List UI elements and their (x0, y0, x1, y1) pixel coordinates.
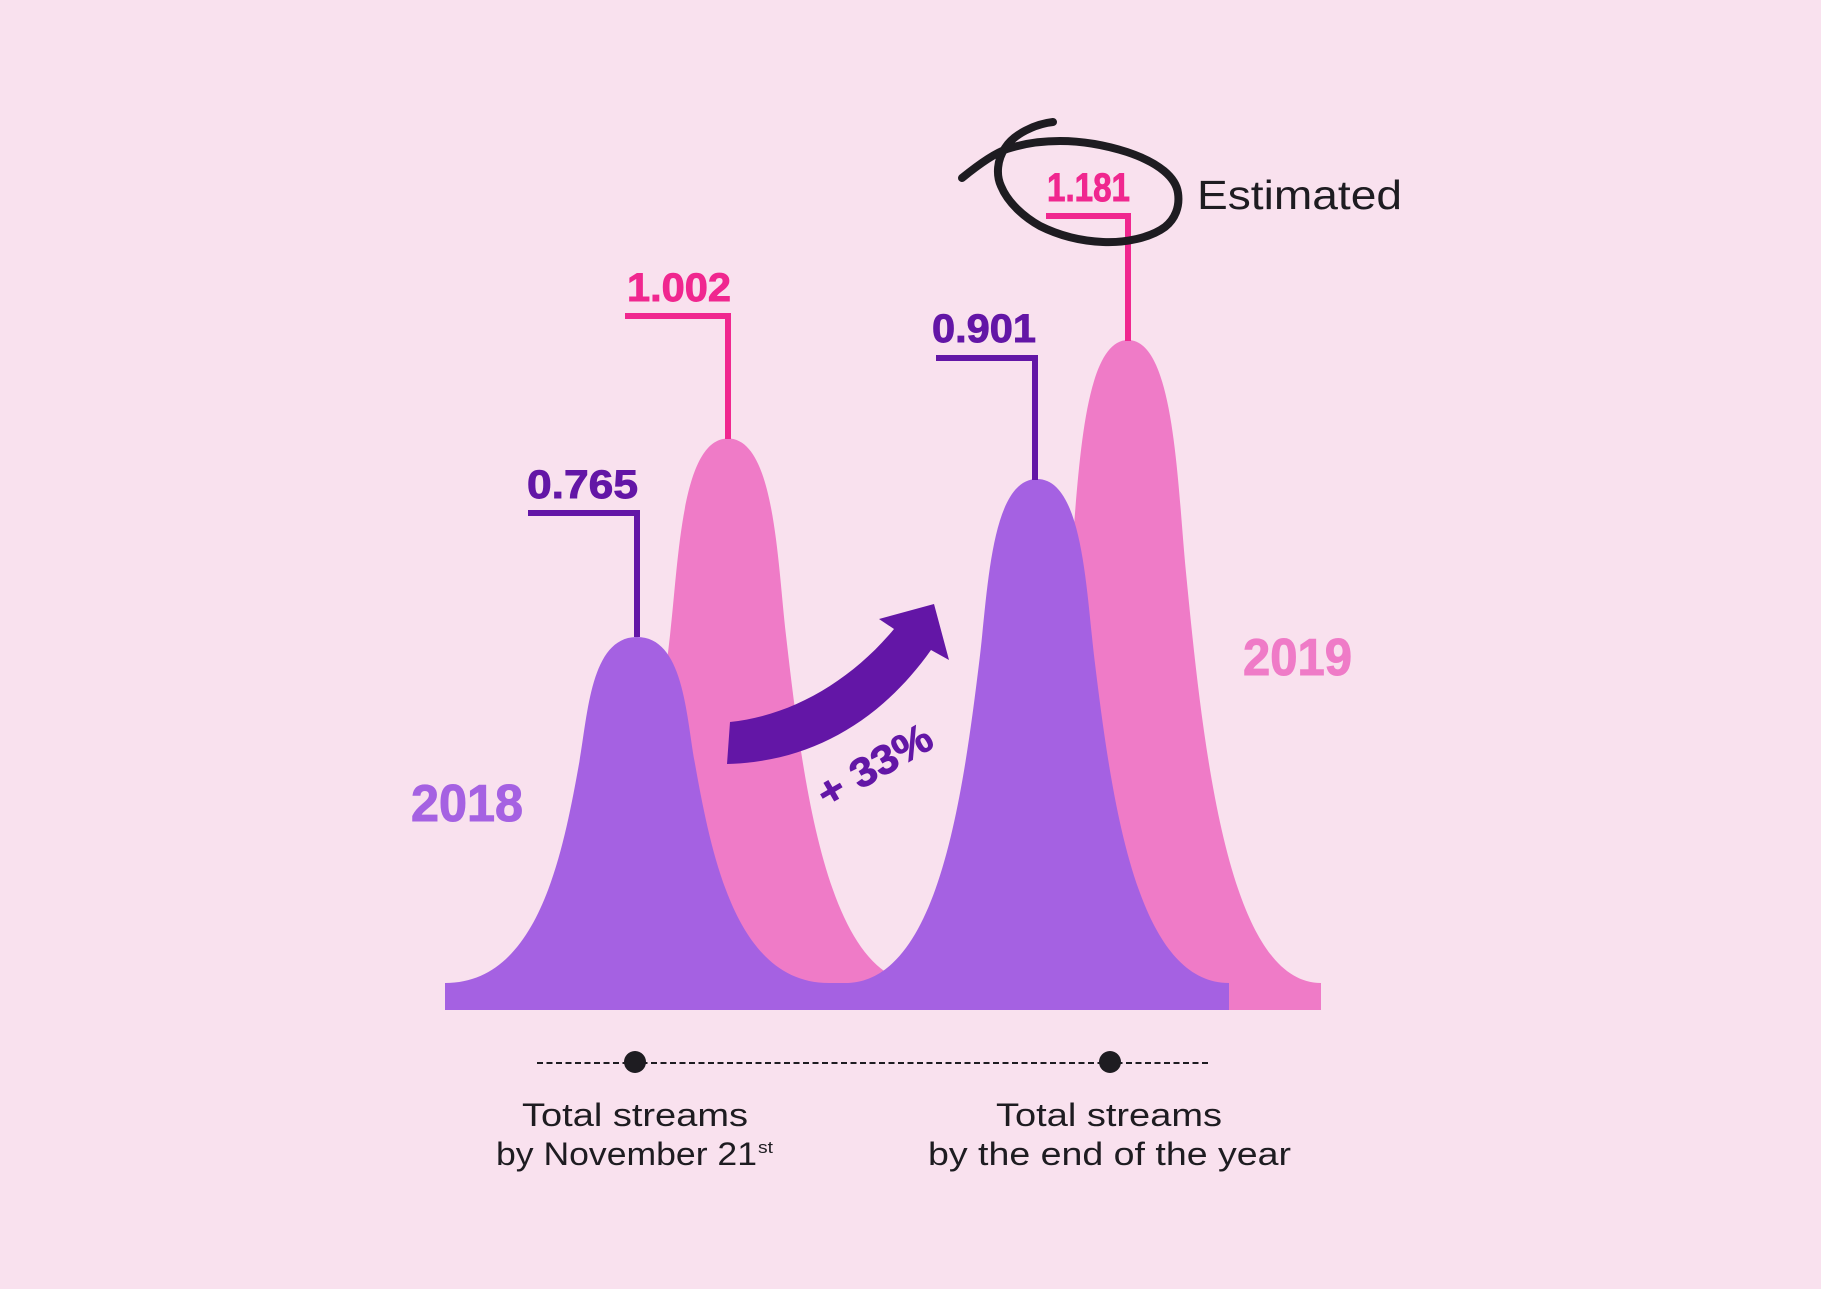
chart: overlapping bell curves (445, 340, 1321, 1010)
caption: total streams by the end of the year (928, 1097, 1291, 1172)
bell: 2019 November value (535, 438, 921, 983)
timeline marker: November 21st (624, 1051, 646, 1073)
caption: total streams by November 21st (496, 1097, 773, 1172)
timeline marker: year end (1099, 1051, 1121, 1073)
callout: 1.181: 1.181 (1047, 166, 1130, 210)
arrow: growth (727, 604, 949, 764)
label: 2019: 2019 (1243, 629, 1352, 687)
callout: 0.765: 0.765 (527, 463, 638, 507)
callout: 0.765 (527, 463, 638, 637)
label: +33%: + 33% (808, 714, 941, 817)
chart base band (445, 983, 1229, 1010)
caption: total streams by the end of the year: by the end of the year (928, 1136, 1291, 1172)
timeline (537, 1051, 1208, 1073)
bell: 2019 year-end value with base (935, 340, 1321, 1010)
callout: 1.002 (625, 266, 731, 439)
caption: total streams by November 21st: Total streams (522, 1097, 748, 1133)
bell: 2018 year-end value (845, 479, 1229, 983)
caption: total streams by November 21st: st (758, 1138, 773, 1157)
label: Estimated: Estimated (1197, 172, 1402, 218)
callout: 1.181 (1046, 166, 1130, 341)
callout: 0.901: 0.901 (932, 307, 1036, 351)
caption: total streams by November 21st: by November 21 (496, 1136, 757, 1172)
callout: 1.002: 1.002 (627, 266, 731, 310)
label: 2018: 2018 (411, 775, 523, 833)
caption: total streams by the end of the year: Total streams (996, 1097, 1222, 1133)
callout: 0.901 (932, 307, 1036, 480)
bell: 2018 November value (445, 637, 829, 983)
hand-drawn circle around estimate (962, 122, 1178, 242)
